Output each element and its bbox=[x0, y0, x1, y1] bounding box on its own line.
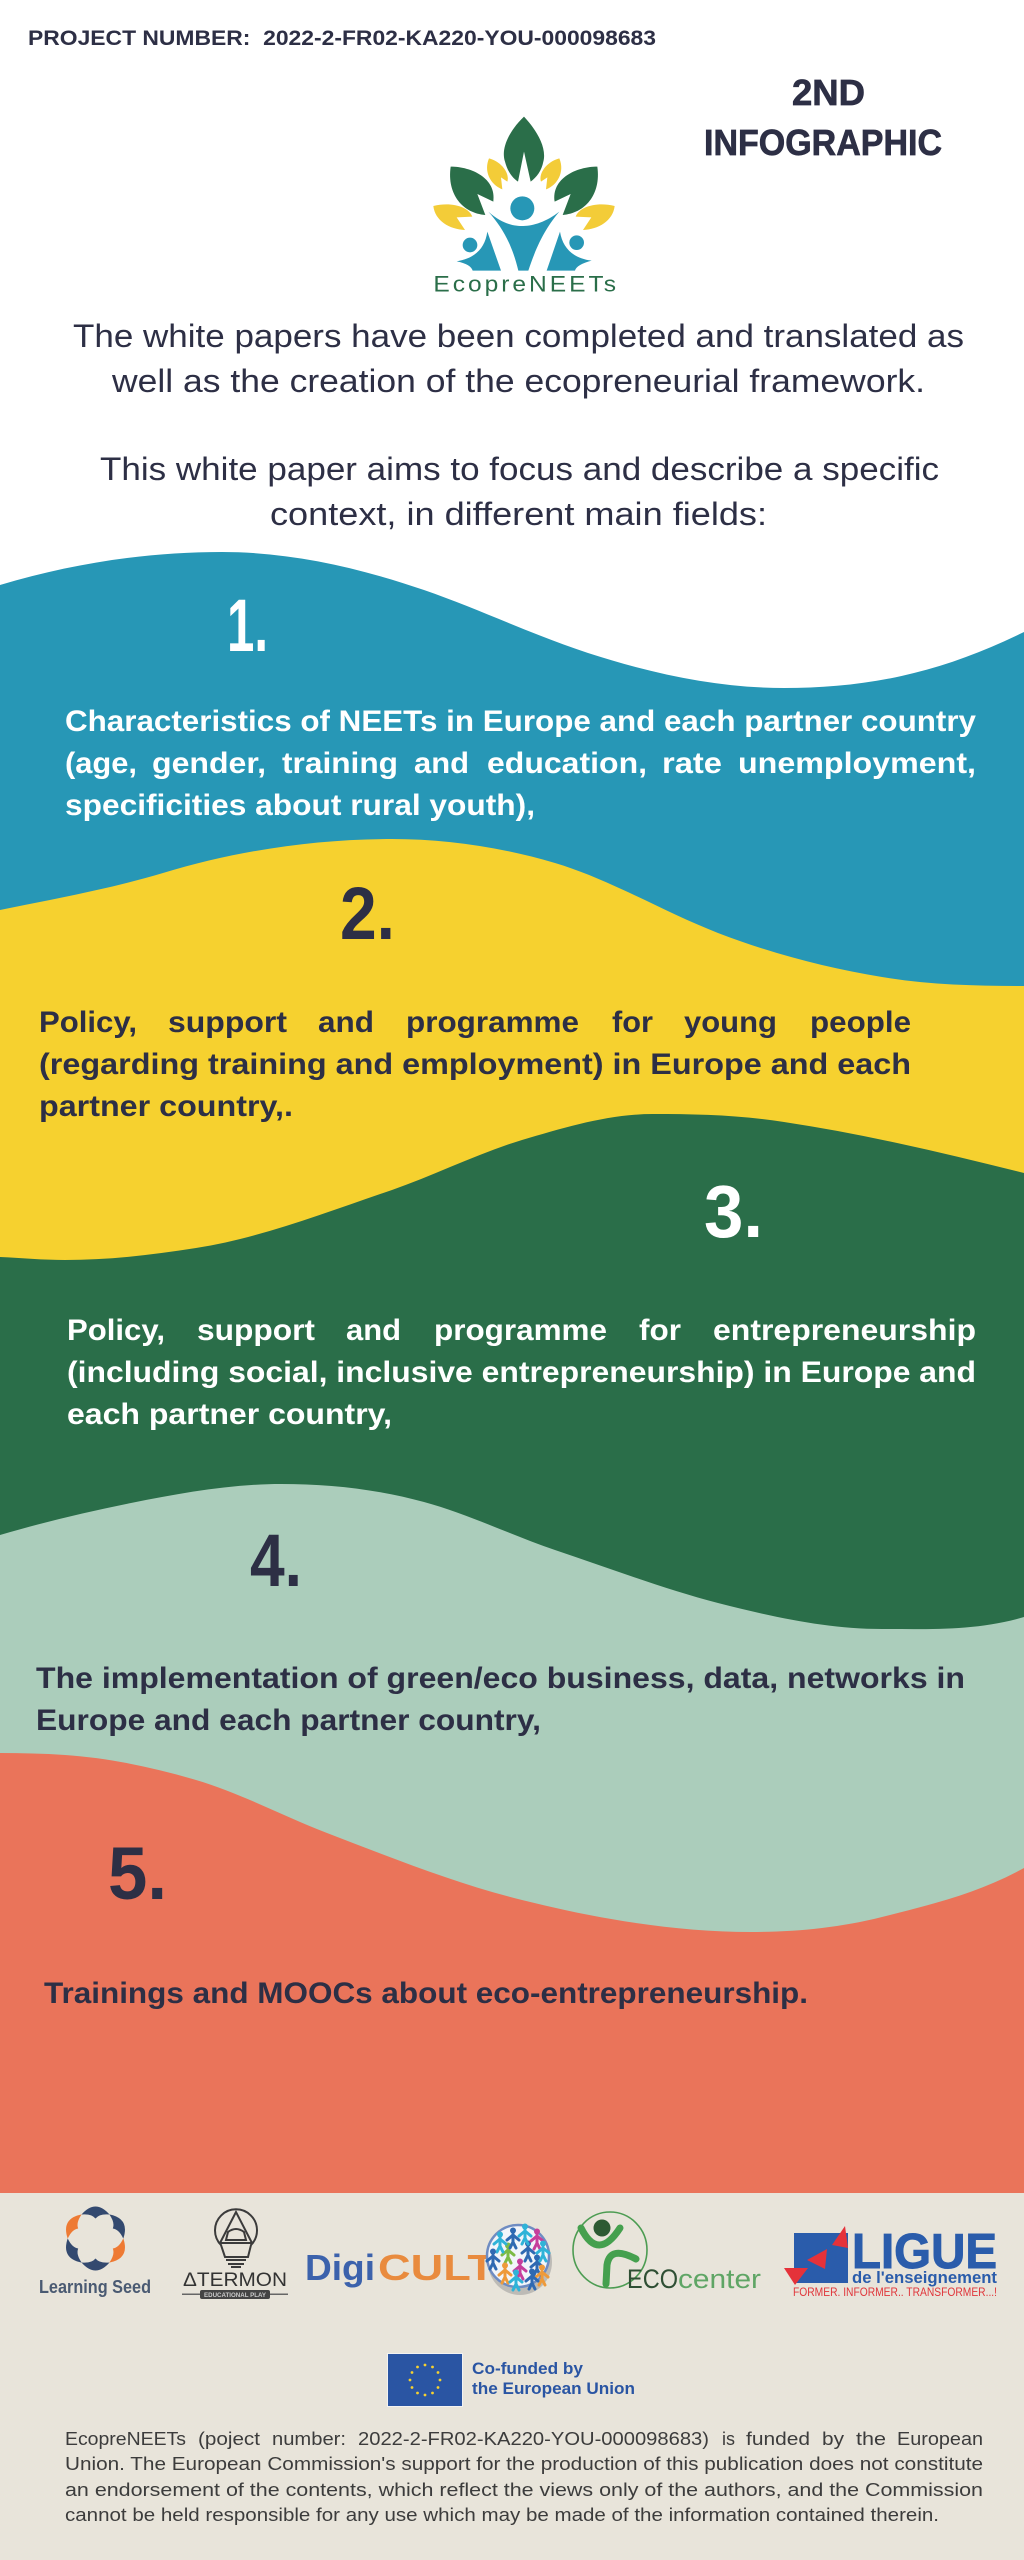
text block 3: for bbox=[639, 1314, 681, 1347]
wordmark: CULT bbox=[378, 2247, 495, 2288]
disclaimer text: funded bbox=[746, 2428, 810, 2449]
logo: Atermon bbox=[182, 2209, 288, 2299]
icon: globe of people bbox=[487, 2224, 552, 2295]
disclaimer text: 2022-2-FR02-KA220-YOU-000098683) bbox=[358, 2428, 709, 2449]
intro text: This white paper aims to focus and describe a specific bbox=[100, 451, 939, 487]
panel 1: teal wave bbox=[0, 552, 1024, 1100]
text block 2: support bbox=[168, 1006, 287, 1039]
text block 2: Policy, bbox=[39, 1006, 137, 1039]
number 5: 5. bbox=[108, 1832, 167, 1915]
intro text: well as the creation of the ecopreneurial framework. bbox=[111, 363, 925, 399]
disclaimer text: European bbox=[897, 2428, 983, 2449]
logo: ECOcenter bbox=[573, 2212, 761, 2294]
panel 3: green wave bbox=[0, 1114, 1024, 1700]
logo: Ligue de l'enseignement bbox=[784, 2225, 997, 2299]
disclaimer text: (poject bbox=[198, 2428, 260, 2449]
text block 1: Characteristics of NEETs in Europe and each partner country bbox=[65, 705, 976, 738]
EU co-funding emblem bbox=[388, 2354, 635, 2406]
disclaimer text: the bbox=[856, 2428, 886, 2449]
label: Learning Seed bbox=[39, 2277, 151, 2297]
wordmark: LIGUE bbox=[852, 2225, 997, 2279]
text block 1: specificities about rural youth), bbox=[65, 789, 535, 822]
text block 1: (age, bbox=[65, 747, 137, 780]
co-funded label: the European Union bbox=[472, 2379, 635, 2398]
text block 3 bbox=[67, 1314, 976, 1431]
text block 1: training bbox=[282, 747, 398, 780]
disclaimer text: by bbox=[822, 2428, 845, 2449]
text block 4 bbox=[36, 1662, 965, 1737]
icon: seed petals bbox=[61, 2206, 130, 2270]
text block 3: each partner country, bbox=[67, 1398, 392, 1431]
title bbox=[704, 72, 942, 163]
logo: EcopreNEETs bbox=[433, 117, 619, 297]
disclaimer text: Union. The European Commission's support for the production of this publication does not constitute bbox=[65, 2453, 983, 2474]
intro text bbox=[73, 318, 964, 532]
text block 2: (regarding training and employment) in Europe and each bbox=[39, 1048, 911, 1081]
disclaimer text: number: bbox=[272, 2428, 346, 2449]
title: INFOGRAPHIC bbox=[704, 122, 942, 163]
footer panel bbox=[0, 2193, 1024, 2560]
text block 2: programme bbox=[406, 1006, 579, 1039]
panel 2: yellow wave bbox=[0, 839, 1024, 1300]
icon: person in circle bbox=[573, 2212, 647, 2288]
text block 1 bbox=[65, 705, 976, 822]
intro text: The white papers have been completed and translated as bbox=[73, 318, 964, 354]
disclaimer text: an endorsement of the contents, which reflect the views only of the authors, and the Commission bbox=[65, 2479, 983, 2500]
text block 3: Policy, bbox=[67, 1314, 165, 1347]
icon: light bulb bbox=[215, 2209, 257, 2267]
text block 3: (including social, inclusive entrepreneurship) in Europe and bbox=[67, 1356, 976, 1389]
text block 2: people bbox=[810, 1006, 911, 1039]
text block 3: support bbox=[197, 1314, 315, 1347]
project number: PROJECT NUMBER: 2022-2-FR02-KA220-YOU-000098683 bbox=[28, 27, 656, 50]
text block 3: entrepreneurship bbox=[713, 1314, 976, 1347]
wordmark: ECO bbox=[627, 2264, 678, 2294]
logo: Learning Seed bbox=[39, 2206, 151, 2297]
text block 1: rate bbox=[662, 747, 722, 780]
text block 2: and bbox=[318, 1006, 374, 1039]
label: ΔTERMON bbox=[183, 2270, 287, 2291]
number 1: 1. bbox=[227, 584, 268, 667]
disclaimer text: EcopreNEETs bbox=[65, 2428, 186, 2449]
logo: DigiCULT bbox=[305, 2224, 552, 2295]
text block 2: for bbox=[612, 1006, 653, 1039]
icon: blue square bbox=[794, 2233, 848, 2283]
disclaimer text: is bbox=[722, 2428, 735, 2449]
number 4: 4. bbox=[250, 1519, 302, 1602]
tagline bar: EDUCATIONAL PLAY bbox=[204, 2292, 267, 2299]
text block 2 bbox=[39, 1006, 911, 1123]
panel 4: sage wave bbox=[0, 1484, 1024, 1950]
text block 1: education, bbox=[487, 747, 647, 780]
tagline: FORMER. INFORMER.. TRANSFORMER...! bbox=[793, 2287, 997, 2299]
text block 4: Europe and each partner country, bbox=[36, 1704, 541, 1737]
subtitle: de l'enseignement bbox=[852, 2268, 997, 2287]
number 3: 3. bbox=[704, 1170, 763, 1253]
number 2: 2. bbox=[340, 872, 395, 955]
text block 3: and bbox=[346, 1314, 401, 1347]
icon: red arrows bbox=[784, 2226, 848, 2285]
disclaimer text bbox=[65, 2428, 983, 2525]
panel 5: coral wave bbox=[0, 1753, 1024, 2193]
disclaimer text: cannot be held responsible for any use which may be made of the information contained therein. bbox=[65, 2504, 939, 2525]
text block 3: programme bbox=[434, 1314, 607, 1347]
icon: yellow leaves bbox=[433, 158, 615, 230]
icon: three people bbox=[457, 196, 592, 271]
text block 1: unemployment, bbox=[738, 747, 976, 780]
text block 4: The implementation of green/eco business, data, networks in bbox=[36, 1662, 965, 1695]
logo wordmark: EcopreNEETs bbox=[433, 272, 619, 297]
text block 1: gender, bbox=[152, 747, 266, 780]
title: 2ND bbox=[792, 72, 865, 113]
wordmark: Digi bbox=[305, 2247, 375, 2288]
intro text: context, in different main fields: bbox=[270, 496, 767, 532]
text block 2: young bbox=[684, 1006, 777, 1039]
text block 2: partner country,. bbox=[39, 1090, 293, 1123]
text block 1: and bbox=[414, 747, 469, 780]
wordmark: center bbox=[678, 2264, 761, 2294]
icon: green leaves bbox=[450, 117, 598, 215]
icon: EU flag bbox=[388, 2354, 462, 2406]
co-funded label bbox=[472, 2359, 635, 2398]
text block 5: Trainings and MOOCs about eco-entrepreneurship. bbox=[44, 1977, 808, 2010]
co-funded label: Co-funded by bbox=[472, 2359, 584, 2378]
